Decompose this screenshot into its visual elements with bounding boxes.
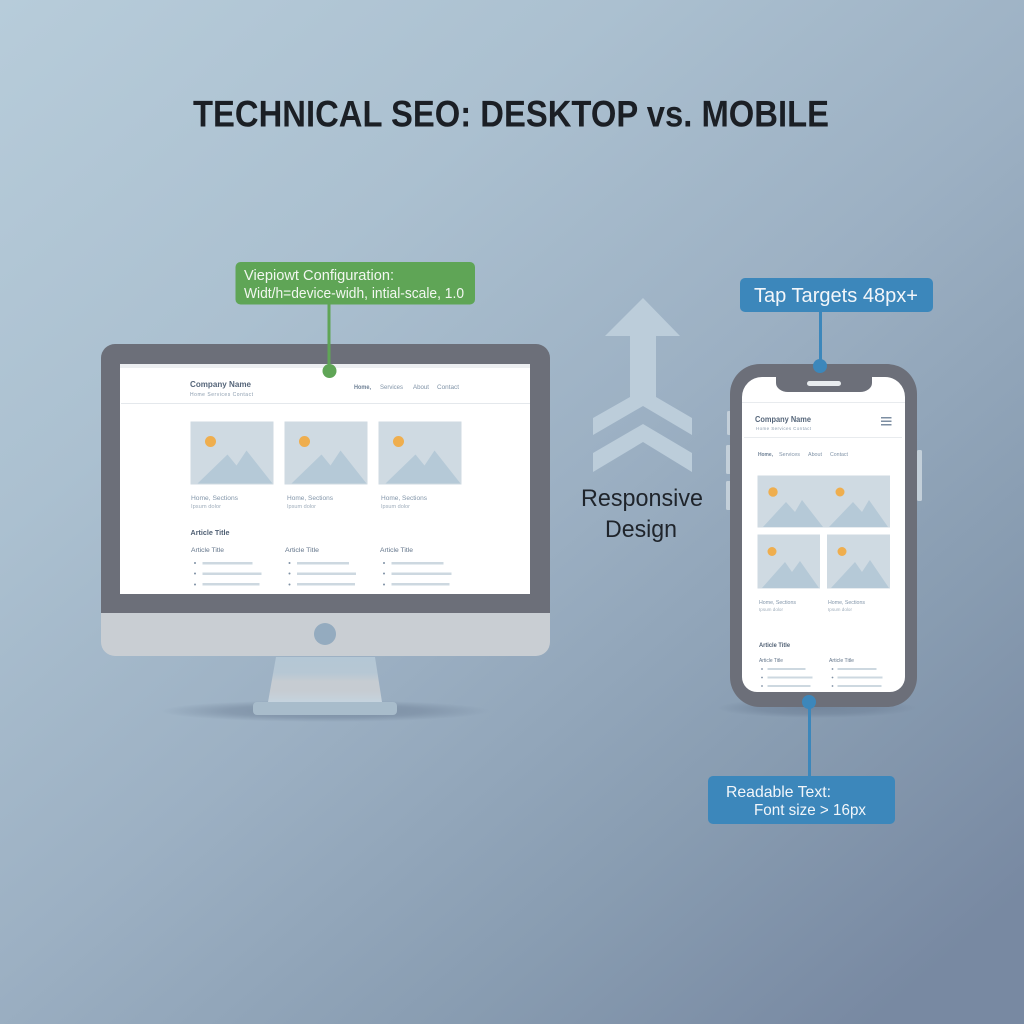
callout: readable text: [708, 695, 895, 824]
tap connector: [819, 310, 822, 366]
phone small images: [758, 534, 890, 588]
desktop image cards: [190, 422, 462, 484]
desktop card captions: Ipsum dolor: [191, 504, 221, 510]
desktop header: About: [413, 385, 429, 391]
phone header: Home Services Contact: [756, 426, 812, 431]
icon: hamburger menu: [881, 417, 892, 426]
phone article: Article Title: [759, 658, 783, 664]
phone body: [730, 364, 917, 707]
smartphone: [717, 364, 922, 718]
desktop article: Article Title: [285, 547, 319, 554]
phone captions: Home, Sections: [759, 600, 796, 606]
responsive design label: [581, 485, 703, 543]
readable label: [708, 776, 895, 824]
phone nav: Home,: [758, 452, 773, 458]
phone header: [755, 415, 812, 431]
desktop card captions: Home, Sections: [381, 495, 428, 502]
desktop header: [190, 379, 459, 398]
phone nav: About: [808, 452, 822, 458]
monitor shadow: [160, 700, 490, 722]
phone nav: Services: [779, 452, 800, 458]
callout: readable text: Font size > 16px: [754, 802, 866, 819]
readable connector: [808, 702, 811, 778]
phone captions: [759, 600, 865, 612]
desktop header: Home,: [354, 385, 371, 391]
tap anchor dot: [813, 359, 827, 373]
phone header: Company Name: [755, 415, 812, 424]
title: TECHNICAL SEO: DESKTOP vs. MOBILE: [193, 94, 829, 134]
monitor bezel: [101, 344, 550, 613]
phone wide image: [758, 476, 890, 528]
phone captions: Ipsum dolor: [828, 607, 853, 612]
phone article: Article Title: [829, 658, 854, 664]
phone side buttons: [726, 411, 922, 510]
phone screen: [742, 377, 905, 692]
desktop monitor: [101, 344, 550, 722]
phone speaker: [807, 381, 841, 386]
desktop card captions: Home, Sections: [287, 495, 334, 502]
callout: viewport configuration: [236, 262, 475, 378]
responsive design label: Design: [605, 516, 677, 543]
responsive design label: Responsive: [581, 485, 703, 512]
desktop screen: [120, 364, 530, 594]
phone captions: Ipsum dolor: [759, 607, 784, 612]
desktop header: Contact: [437, 385, 459, 391]
desktop article: Article Title: [191, 547, 224, 554]
green label: [236, 262, 475, 304]
desktop article: [190, 530, 452, 586]
desktop card captions: [191, 495, 428, 510]
phone captions: Home, Sections: [828, 600, 865, 606]
desktop article: Article Title: [190, 530, 230, 537]
green connector: [328, 300, 330, 371]
desktop card captions: Home, Sections: [191, 495, 239, 502]
monitor button: [314, 623, 336, 645]
readable anchor dot: [802, 695, 816, 709]
callout: viewport configuration: Widt/h=device-widh, intial-scale, 1.0: [244, 285, 464, 302]
callout: tap targets: Tap Targets 48px+: [754, 285, 918, 307]
monitor base: [253, 702, 397, 715]
desktop card captions: Ipsum dolor: [381, 504, 410, 510]
monitor stand: [268, 657, 382, 702]
callout: readable text: Readable Text:: [726, 784, 831, 801]
tap label: [740, 278, 933, 312]
desktop header: Services: [380, 385, 403, 391]
icon: responsive arrow: [593, 298, 692, 472]
callout: viewport configuration: Viepiowt Configuration:: [244, 267, 394, 284]
phone shadow: [717, 698, 917, 718]
callout: tap targets: [740, 278, 933, 373]
desktop header: Home Services Contact: [190, 392, 254, 398]
desktop header: Company Name: [190, 379, 251, 389]
desktop article: Article Title: [380, 547, 413, 554]
phone nav: [758, 452, 848, 458]
green anchor dot: [322, 364, 336, 378]
monitor chin: [101, 613, 550, 656]
phone article: [759, 642, 882, 687]
phone article: Article Title: [759, 642, 790, 649]
desktop card captions: Ipsum dolor: [287, 504, 316, 510]
phone nav: Contact: [830, 452, 848, 458]
